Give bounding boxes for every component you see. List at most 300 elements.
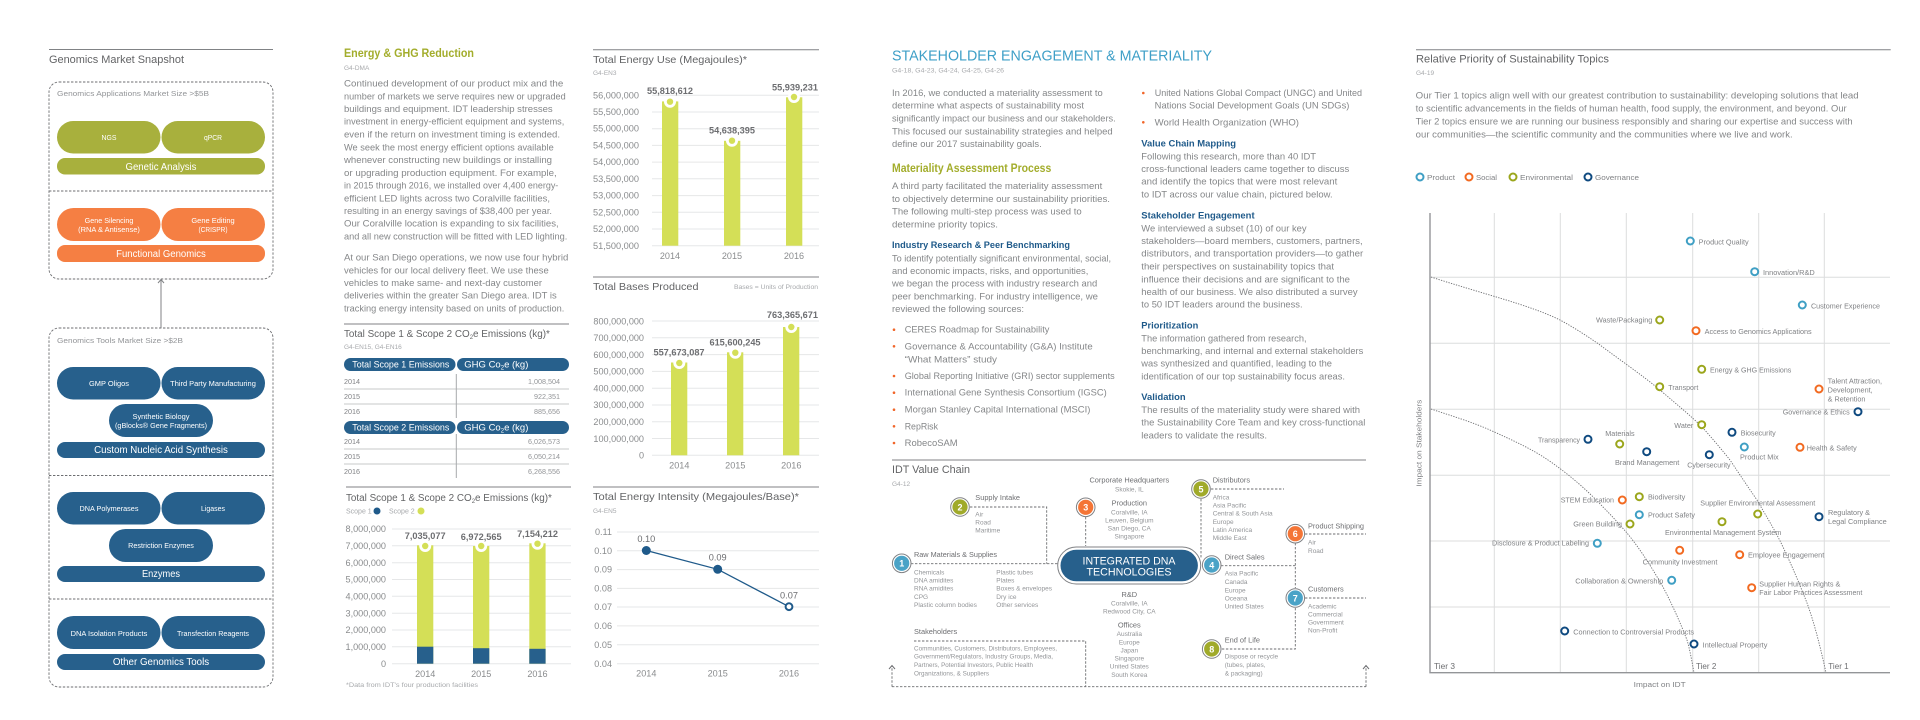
node 1: raw materials: Boxes & envelopes bbox=[996, 586, 1053, 593]
legend: topic categories: Product bbox=[1427, 173, 1455, 182]
table rows: scope 1: 2014 bbox=[344, 377, 360, 386]
line series bbox=[636, 534, 799, 679]
body text: investment in energy-efficient equipment and systems, bbox=[344, 117, 564, 127]
heading: materiality assessment process: Materiality Assessment Process bbox=[892, 162, 1051, 175]
gridlines and y axis: 56,000,000 bbox=[593, 90, 639, 100]
body text: number of markets we serve requires new or upgraded bbox=[344, 91, 566, 101]
paragraph: industry research: peer benchmarking. For industry intelligence, we bbox=[892, 291, 1098, 301]
block: R&D and offices bbox=[1103, 590, 1156, 679]
intro paragraph: significantly impact our business and our stakeholders. bbox=[892, 114, 1116, 124]
node 2: supply intake: Air bbox=[975, 511, 984, 518]
gridlines and y axis: 600,000,000 bbox=[593, 350, 644, 360]
enzymes group: Enzymes bbox=[142, 569, 180, 580]
table rows: scope 1: 885,656 bbox=[534, 407, 560, 416]
note: bases: Bases = Units of Production bbox=[734, 284, 818, 291]
section: prioritization: The information gathered from research, bbox=[1141, 333, 1307, 343]
table rows: scope 1: 922,351 bbox=[534, 392, 560, 401]
bullet list: sources: Global Reporting Initiative (GRI) sector supplements bbox=[905, 371, 1115, 381]
box: genomics tools market: Genomics Tools Market Size >$2B bbox=[57, 336, 183, 345]
table rows: scope 2: 2015 bbox=[344, 452, 360, 461]
intro paragraph: to scientific advancements in the fields of human health, food supply, the environment, and beyond. Our bbox=[1416, 104, 1847, 114]
paragraph: third party bbox=[892, 181, 1110, 229]
topic: transparency: Transparency bbox=[1538, 435, 1580, 444]
topic: talent: & Retention bbox=[1828, 395, 1865, 404]
reference code: G4-EN15, G4-EN16 bbox=[344, 344, 402, 351]
panel: relative priority of sustainability topics bbox=[1415, 50, 1891, 689]
node 5: distributors: Central & South Asia bbox=[1213, 510, 1273, 517]
block: stakeholders bbox=[914, 627, 1057, 677]
heading: emissions table: e Emissions (kg)* bbox=[473, 329, 550, 340]
paragraph: third party: determine priority topics. bbox=[892, 219, 998, 229]
table rows: scope 1: 1,008,504 bbox=[528, 377, 560, 386]
node 7: customers bbox=[1286, 585, 1344, 635]
line series: 2016 bbox=[779, 669, 799, 679]
gridlines and y axis: 200,000,000 bbox=[593, 417, 644, 427]
section: stakeholder engagement: their perspectives on sustainability topics that bbox=[1141, 261, 1334, 271]
topic: talent: Development, bbox=[1828, 386, 1873, 395]
panel: stakeholder engagement and materiality text bbox=[891, 48, 1365, 448]
functional genomics group: (CRISPR) bbox=[198, 225, 228, 234]
line series: 0.10 bbox=[637, 534, 655, 544]
topic: product quality: Product Quality bbox=[1699, 237, 1749, 246]
bar 2016: 55,939,231 bbox=[772, 83, 818, 93]
bullet list: sources continued: Nations Social Development Goals (UN SDGs) bbox=[1155, 101, 1349, 111]
node 3: production: Leuven, Belgium bbox=[1105, 518, 1154, 524]
table header: scope 1 bbox=[344, 358, 569, 372]
node 3: production: San Diego, CA bbox=[1108, 525, 1151, 532]
node 3: production: Corporate Headquarters bbox=[1089, 476, 1169, 485]
body text: resulting in an energy savings of $38,400 per year. bbox=[344, 206, 552, 216]
panel: emissions stacked bar chart bbox=[346, 487, 571, 689]
node 4: direct sales: Direct Sales bbox=[1225, 552, 1265, 561]
section: validation: Validation bbox=[1141, 391, 1186, 402]
intro paragraph: Tier 2 topics ensure we are running our business responsibly and sharing our expertise and success with bbox=[1416, 116, 1853, 126]
block: stakeholders: Organizations, & Suppliers bbox=[914, 670, 990, 677]
box: genomics applications market bbox=[49, 82, 273, 279]
block: stakeholders: Communities, Customers, Distributors, Employees, bbox=[914, 646, 1057, 653]
node 1: raw materials: DNA amidites bbox=[914, 578, 954, 584]
bullet list: sources: RepRisk bbox=[905, 421, 938, 431]
node 5: distributors: Distributors bbox=[1213, 476, 1250, 485]
panel: total bases produced chart bbox=[593, 277, 819, 470]
other genomics tools group: Transfection Reagents bbox=[177, 629, 249, 638]
legend: topic categories bbox=[1416, 173, 1639, 182]
bar 2016 bbox=[772, 83, 818, 261]
x axis label: Impact on IDT bbox=[1634, 680, 1686, 689]
intro paragraph: our communities—the scientific community and the communities where we live and work. bbox=[1416, 129, 1793, 139]
panel: energy and GHG reduction text bbox=[343, 47, 568, 314]
node 4: direct sales: United States bbox=[1225, 604, 1264, 611]
bullet list: sources: RobecoSAM bbox=[905, 438, 958, 448]
gridlines and y axis: 1,000,000 bbox=[346, 642, 386, 652]
topic: collaboration and ownership: Collaboration & Ownership bbox=[1575, 576, 1663, 585]
heading: emissions chart: e Emissions (kg)* bbox=[475, 493, 552, 504]
gridlines and y axis: 53,500,000 bbox=[593, 174, 639, 184]
genetic analysis group: qPCR bbox=[204, 133, 222, 142]
bar 2016: 2016 bbox=[784, 251, 804, 261]
body text: efficient LED lights across two Coralville facilities, bbox=[344, 193, 550, 203]
heading: emissions table: Total Scope 1 & Scope 2 CO bbox=[344, 329, 470, 340]
bullet list: sources: “What Matters” study bbox=[905, 354, 997, 364]
line series: 0.09 bbox=[709, 553, 727, 563]
topic: health and safety: Health & Safety bbox=[1807, 443, 1857, 452]
bar 2015: 615,600,245 bbox=[709, 338, 761, 348]
bar 2015 bbox=[709, 338, 761, 470]
genetic analysis group: Genetic Analysis bbox=[126, 162, 196, 173]
enzymes group bbox=[57, 492, 265, 582]
paragraph: industry research: reviewed the following sources: bbox=[892, 304, 1024, 314]
node 1: raw materials: Plastic tubes bbox=[996, 569, 1034, 576]
arrowheads bbox=[889, 666, 1369, 669]
table rows: scope 2: 2016 bbox=[344, 467, 360, 476]
node 7: customers: Academic bbox=[1308, 603, 1337, 610]
topic: STEM education: STEM Education bbox=[1561, 495, 1614, 504]
paragraph: third party: to objectively determine our sustainability priorities. bbox=[892, 194, 1110, 204]
block: R&D and offices: Europe bbox=[1119, 639, 1140, 646]
block: R&D and offices: Coralville, IA bbox=[1111, 600, 1148, 607]
line series: 2015 bbox=[708, 669, 728, 679]
table header: scope 2: Total Scope 2 Emissions bbox=[352, 422, 450, 432]
section: prioritization: was synthesized and quantified, leading to the bbox=[1140, 359, 1332, 369]
topic: brand management: Brand Management bbox=[1615, 458, 1679, 467]
body text: and all new construction will be fitted with LED lighting. bbox=[344, 231, 567, 241]
table header: scope 2 bbox=[344, 421, 569, 434]
topic: environmental management system: Environmental Management System bbox=[1665, 528, 1781, 537]
node 3: production: Coralville, IA bbox=[1111, 509, 1148, 516]
enzymes group: Ligases bbox=[201, 504, 225, 513]
topic: energy and GHG emissions: Energy & GHG Emissions bbox=[1710, 366, 1792, 375]
table rows: scope 1: 2015 bbox=[344, 392, 360, 401]
node 4: direct sales: 4 bbox=[1209, 560, 1214, 570]
section: validation bbox=[1141, 391, 1365, 440]
node 1: raw materials: Other services bbox=[996, 602, 1039, 609]
reference code: G4-12 bbox=[892, 481, 910, 488]
node 7: customers: 7 bbox=[1293, 593, 1298, 603]
block: R&D and offices: Offices bbox=[1118, 621, 1141, 630]
table header: scope 1: GHG Co bbox=[464, 360, 501, 370]
intro paragraph: Our Tier 1 topics align well with our greatest contribution to sustainability: developing solutions that lead bbox=[1416, 91, 1859, 101]
functional genomics group: Gene Silencing bbox=[85, 216, 133, 225]
intro paragraph: define our 2017 sustainability goals. bbox=[892, 139, 1042, 149]
heading: total bases produced: Total Bases Produced bbox=[593, 282, 699, 293]
bar 2015: 54,638,395 bbox=[709, 125, 755, 135]
body text: even if the return on investment timing is extended. bbox=[344, 130, 560, 140]
gridlines and y axis: 52,500,000 bbox=[593, 208, 639, 218]
topic: water bbox=[1674, 421, 1705, 430]
bar 2014: 7,035,077 bbox=[405, 531, 446, 541]
bullet list: sources: CERES Roadmap for Sustainability bbox=[905, 325, 1050, 335]
bar 2015 bbox=[461, 532, 502, 679]
topic: connection to controversial products: Connection to Controversial Products bbox=[1573, 627, 1694, 636]
reference code: G4-19 bbox=[1416, 70, 1434, 77]
block: R&D and offices: Japan bbox=[1120, 648, 1139, 655]
gridlines and y axis: 0.04 bbox=[594, 659, 612, 669]
bar 2016 bbox=[517, 529, 558, 679]
gridlines and y axis: 54,000,000 bbox=[593, 157, 639, 167]
node 1: raw materials bbox=[892, 550, 1053, 609]
bar 2016: 2016 bbox=[527, 669, 548, 679]
gridlines and y axis: 55,000,000 bbox=[593, 124, 639, 134]
table header: scope 1: e (kg) bbox=[504, 360, 528, 370]
node 6: product shipping bbox=[1286, 521, 1364, 555]
heading: emissions table: 2 bbox=[470, 335, 474, 341]
paragraph: industry research: To identify potentially significant environmental, social, bbox=[892, 253, 1111, 263]
node 4: direct sales: Europe bbox=[1225, 587, 1246, 594]
section: stakeholder engagement: stakeholders—board members, customers, partners, bbox=[1141, 236, 1363, 246]
bullet list: sources continued: United Nations Global Compact (UNGC) and United bbox=[1155, 88, 1362, 98]
topic: regulatory and legal compliance bbox=[1816, 508, 1887, 526]
bullet list: sources: Governance & Accountability (G&A) Institute bbox=[905, 341, 1093, 351]
bullet list: sources continued bbox=[1142, 88, 1362, 127]
gridlines and y axis: 0.09 bbox=[594, 565, 612, 575]
node 2: supply intake: Road bbox=[975, 520, 991, 526]
body text: Our Coralville location is expanding to six facilities, bbox=[344, 219, 559, 229]
bar 2014: 2014 bbox=[660, 251, 680, 261]
topic: customer experience: Customer Experience bbox=[1811, 302, 1880, 311]
section: value chain mapping: Value Chain Mapping bbox=[1141, 138, 1236, 149]
heading: total energy use: Total Energy Use (Megajoules)* bbox=[593, 55, 747, 66]
gridlines and y axis: 54,500,000 bbox=[593, 140, 639, 150]
node 3: production: Skokie, IL bbox=[1115, 487, 1144, 494]
topic: disclosure and product labeling: Disclosure & Product Labeling bbox=[1492, 539, 1589, 548]
node 5: distributors: Europe bbox=[1213, 519, 1234, 526]
node 1: raw materials: Dry ice bbox=[996, 594, 1017, 601]
block: R&D and offices: Singapore bbox=[1114, 656, 1144, 663]
gridlines and y axis: 100,000,000 bbox=[593, 434, 644, 444]
bar 2014 bbox=[405, 531, 446, 679]
section: value chain mapping: cross-functional leaders came together to discuss bbox=[1141, 164, 1350, 174]
table rows: scope 1 bbox=[344, 374, 569, 418]
panel: emissions table bbox=[344, 324, 569, 478]
table rows: scope 1: 2016 bbox=[344, 407, 360, 416]
reference codes: G4-18, G4-23, G4-24, G4-25, G4-26 bbox=[892, 68, 1004, 75]
center pill: integrated DNA technologies: TECHNOLOGIES bbox=[1086, 566, 1172, 578]
box: genomics applications market: Genomics Applications Market Size >$5B bbox=[57, 89, 209, 98]
functional genomics group bbox=[57, 208, 265, 262]
section: stakeholder engagement: health of our business. We also distributed a survey bbox=[1141, 287, 1358, 297]
block: R&D and offices: Australia bbox=[1117, 631, 1142, 638]
node 4: direct sales bbox=[1202, 552, 1265, 611]
body text: vehicles for our local delivery fleet. We use these bbox=[344, 265, 549, 275]
topic: biosecurity: Biosecurity bbox=[1741, 429, 1776, 438]
section: value chain mapping bbox=[1141, 138, 1350, 200]
section: prioritization: Prioritization bbox=[1141, 319, 1199, 330]
panel: genomics market snapshot bbox=[49, 50, 273, 687]
node 3: production: 3 bbox=[1083, 503, 1088, 513]
topic: environmental management system bbox=[1665, 518, 1781, 537]
genetic analysis group: NGS bbox=[102, 133, 116, 142]
node 6: product shipping: Air bbox=[1308, 540, 1317, 547]
heading: total energy intensity: Total Energy Intensity (Megajoules/Base)* bbox=[593, 492, 799, 503]
topic: innovation: Innovation/R&D bbox=[1763, 268, 1815, 277]
section: stakeholder engagement bbox=[1141, 209, 1363, 310]
y axis label: Impact on Stakeholders bbox=[1415, 399, 1424, 487]
functional genomics group: (RNA & Antisense) bbox=[78, 225, 140, 234]
node 6: product shipping: Product Shipping bbox=[1308, 521, 1364, 530]
topic: community investment bbox=[1643, 547, 1717, 566]
node 1: raw materials: Plates bbox=[996, 578, 1015, 584]
section: stakeholder engagement: Stakeholder Engagement bbox=[1141, 209, 1255, 220]
body text: Continued development of our product mix and the bbox=[344, 79, 563, 89]
node 4: direct sales: Asia Pacific bbox=[1225, 571, 1259, 578]
body text: tracking energy intensity based on units of production. bbox=[344, 304, 564, 314]
panel: IDT value chain diagram bbox=[889, 460, 1369, 687]
arrow: tools to applications bbox=[158, 280, 164, 328]
block: stakeholders: Partners, Potential Investors, Public Health bbox=[914, 662, 1033, 669]
legend: topic categories: Governance bbox=[1595, 173, 1639, 182]
bullet list: sources bbox=[893, 325, 1115, 448]
section: validation: leaders to validate the results. bbox=[1141, 430, 1267, 440]
other genomics tools group bbox=[57, 616, 265, 670]
heading: IDT value chain: IDT Value Chain bbox=[892, 464, 970, 476]
gridlines and y axis: 53,000,000 bbox=[593, 191, 639, 201]
main title: STAKEHOLDER ENGAGEMENT & MATERIALITY bbox=[892, 48, 1212, 65]
tier labels: Tier 2 bbox=[1696, 662, 1717, 671]
gridlines and y axis: 0.11 bbox=[595, 527, 612, 537]
node 4: direct sales: Oceana bbox=[1225, 596, 1248, 603]
paragraph: third party: The following multi-step process was used to bbox=[892, 207, 1082, 217]
topic: talent: Talent Attraction, bbox=[1828, 377, 1882, 386]
custom nucleic acid synthesis group: Synthetic Biology bbox=[132, 412, 190, 421]
bullet list: sources: International Gene Synthesis Consortium (IGSC) bbox=[905, 388, 1107, 398]
topic: brand management bbox=[1615, 448, 1679, 467]
section: validation: the Sustainability Core Team and key cross-functional bbox=[1141, 418, 1365, 428]
block: R&D and offices: United States bbox=[1110, 664, 1150, 671]
body text: buildings and equipment. IDT leadership stresses bbox=[344, 104, 553, 114]
gridlines and y axis: 0.08 bbox=[594, 584, 612, 594]
legend: scopes bbox=[346, 508, 424, 516]
topic: waste and packaging: Waste/Packaging bbox=[1596, 316, 1652, 325]
topic: materials bbox=[1605, 429, 1635, 448]
gridlines and y axis: 5,000,000 bbox=[346, 575, 386, 585]
gridlines and y axis bbox=[594, 527, 819, 669]
topic: access to genomics applications: Access to Genomics Applications bbox=[1705, 327, 1812, 336]
intro paragraph: determine what aspects of sustainability most bbox=[892, 101, 1084, 111]
table header: scope 2: GHG Co bbox=[464, 422, 501, 434]
gridlines and y axis: 55,500,000 bbox=[593, 107, 639, 117]
block: R&D and offices: South Korea bbox=[1111, 672, 1148, 679]
topic: intellectual property: Intellectual Property bbox=[1703, 641, 1768, 650]
section: prioritization bbox=[1140, 319, 1364, 381]
node 8: end of life: (tubes, plates, bbox=[1225, 662, 1266, 669]
node 1: raw materials: Chemicals bbox=[914, 569, 945, 576]
node 8: end of life: 8 bbox=[1209, 644, 1214, 654]
reference code: G4-EN3 bbox=[593, 70, 617, 77]
legend: scopes: Scope 2 bbox=[389, 508, 415, 516]
block: R&D and offices: R&D bbox=[1121, 590, 1137, 599]
center pill: integrated DNA technologies: INTEGRATED DNA bbox=[1082, 555, 1176, 567]
section: stakeholder engagement: to 50 IDT leaders around the business. bbox=[1141, 300, 1303, 310]
panel: total energy intensity line chart bbox=[593, 487, 819, 679]
body text: deliveries within the greater San Diego area. IDT is bbox=[344, 291, 557, 301]
custom nucleic acid synthesis group: Custom Nucleic Acid Synthesis bbox=[94, 445, 228, 456]
gridlines and y axis: 3,000,000 bbox=[346, 608, 386, 618]
section: stakeholder engagement: influence their decisions and are significant to the bbox=[1141, 274, 1350, 284]
bar 2015: 2015 bbox=[722, 251, 742, 261]
node 8: end of life: & packaging) bbox=[1225, 670, 1263, 677]
node 5: distributors: Africa bbox=[1213, 494, 1230, 501]
footnote: *Data from IDT's four production facilities bbox=[346, 682, 479, 689]
node 5: distributors: Middle East bbox=[1213, 535, 1247, 542]
topic: community investment: Community Investment bbox=[1643, 557, 1717, 566]
subheading: industry research: Industry Research & Peer Benchmarking bbox=[892, 239, 1070, 250]
node 2: supply intake bbox=[951, 493, 1020, 535]
line series: 2014 bbox=[636, 669, 656, 679]
functional genomics group: Gene Editing bbox=[191, 216, 235, 225]
table rows: scope 2 bbox=[344, 434, 569, 478]
paragraph: third party: A third party facilitated the materiality assessment bbox=[892, 181, 1103, 191]
node 6: product shipping: 6 bbox=[1293, 529, 1298, 539]
bar 2016 bbox=[767, 310, 818, 470]
bar 2014: 2014 bbox=[415, 669, 435, 679]
node 5: distributors: 5 bbox=[1198, 484, 1204, 494]
bar 2014 bbox=[647, 86, 693, 261]
section: value chain mapping: to IDT across our value chain, pictured below. bbox=[1141, 190, 1333, 200]
bullet list: sources continued: World Health Organization (WHO) bbox=[1155, 117, 1299, 127]
topic: supplier environmental assessment bbox=[1700, 499, 1815, 518]
functional genomics group: Functional Genomics bbox=[116, 249, 206, 260]
topic: governance and ethics: Governance & Ethics bbox=[1783, 408, 1850, 417]
block: stakeholders: Government/Regulators, Industry Groups, Media, bbox=[914, 654, 1053, 661]
node 5: distributors: Latin America bbox=[1213, 527, 1252, 534]
gridlines and y axis: 0.06 bbox=[594, 621, 612, 631]
panel: total energy use chart bbox=[593, 50, 819, 261]
gridlines and y axis bbox=[593, 90, 819, 251]
box: genomics tools market bbox=[49, 328, 273, 687]
node 4: direct sales: Canada bbox=[1225, 579, 1248, 586]
node 7: customers: Government bbox=[1308, 620, 1344, 627]
table header: scope 2: e (kg) bbox=[504, 422, 528, 434]
heading: emissions chart: Total Scope 1 & Scope 2 CO bbox=[346, 493, 472, 504]
node 2: supply intake: Supply Intake bbox=[975, 493, 1020, 502]
bar 2015: 2015 bbox=[471, 669, 491, 679]
paragraph: industry research: and economic impacts, risks, and opportunities, bbox=[892, 266, 1088, 276]
bar 2014 bbox=[653, 347, 705, 470]
topic: biodiversity: Biodiversity bbox=[1648, 493, 1686, 502]
gridlines and y axis: 300,000,000 bbox=[593, 400, 644, 410]
section: stakeholder engagement: distributors, and transportation providers—to gather bbox=[1141, 249, 1363, 259]
node 5: distributors: Asia Pacific bbox=[1213, 502, 1247, 509]
node 5: distributors bbox=[1192, 476, 1273, 542]
paragraph: industry research: we began the process with industry research and bbox=[891, 279, 1097, 289]
topic: supplier environmental assessment: Supplier Environmental Assessment bbox=[1700, 499, 1815, 508]
tier labels: Tier 3 bbox=[1434, 662, 1456, 671]
node 1: raw materials: CPG bbox=[914, 594, 928, 601]
gridlines and y axis: 4,000,000 bbox=[346, 592, 386, 602]
enzymes group: Restriction Enzymes bbox=[128, 541, 194, 550]
node 6: product shipping: Road bbox=[1308, 548, 1324, 555]
section: value chain mapping: Following this research, more than 40 IDT bbox=[1141, 151, 1316, 161]
bullet list: sources: Morgan Stanley Capital International (MSCI) bbox=[905, 405, 1090, 415]
gridlines and y axis: 0.05 bbox=[594, 640, 612, 650]
custom nucleic acid synthesis group: Third Party Manufacturing bbox=[170, 379, 256, 388]
topic: employee engagement: Employee Engagement bbox=[1748, 551, 1824, 560]
legend: scopes: Scope 1 bbox=[346, 508, 372, 516]
gridlines and y axis: 400,000,000 bbox=[593, 384, 644, 394]
gridlines and y axis: 0 bbox=[381, 659, 386, 669]
gridlines and y axis: 52,000,000 bbox=[593, 224, 639, 234]
gridlines and y axis bbox=[346, 524, 571, 669]
bar 2016: 7,154,212 bbox=[517, 529, 558, 539]
table header: scope 2: 2 bbox=[501, 428, 505, 434]
intro paragraph bbox=[1416, 91, 1859, 139]
heading: genomics market snapshot: Genomics Market Snapshot bbox=[49, 54, 184, 66]
genetic analysis group bbox=[57, 121, 265, 174]
intro paragraph bbox=[892, 88, 1116, 149]
topic: regulatory and legal compliance: Legal Compliance bbox=[1828, 517, 1887, 526]
body text: whenever constructing new buildings or installing bbox=[343, 155, 552, 165]
topic: product mix bbox=[1740, 444, 1779, 461]
